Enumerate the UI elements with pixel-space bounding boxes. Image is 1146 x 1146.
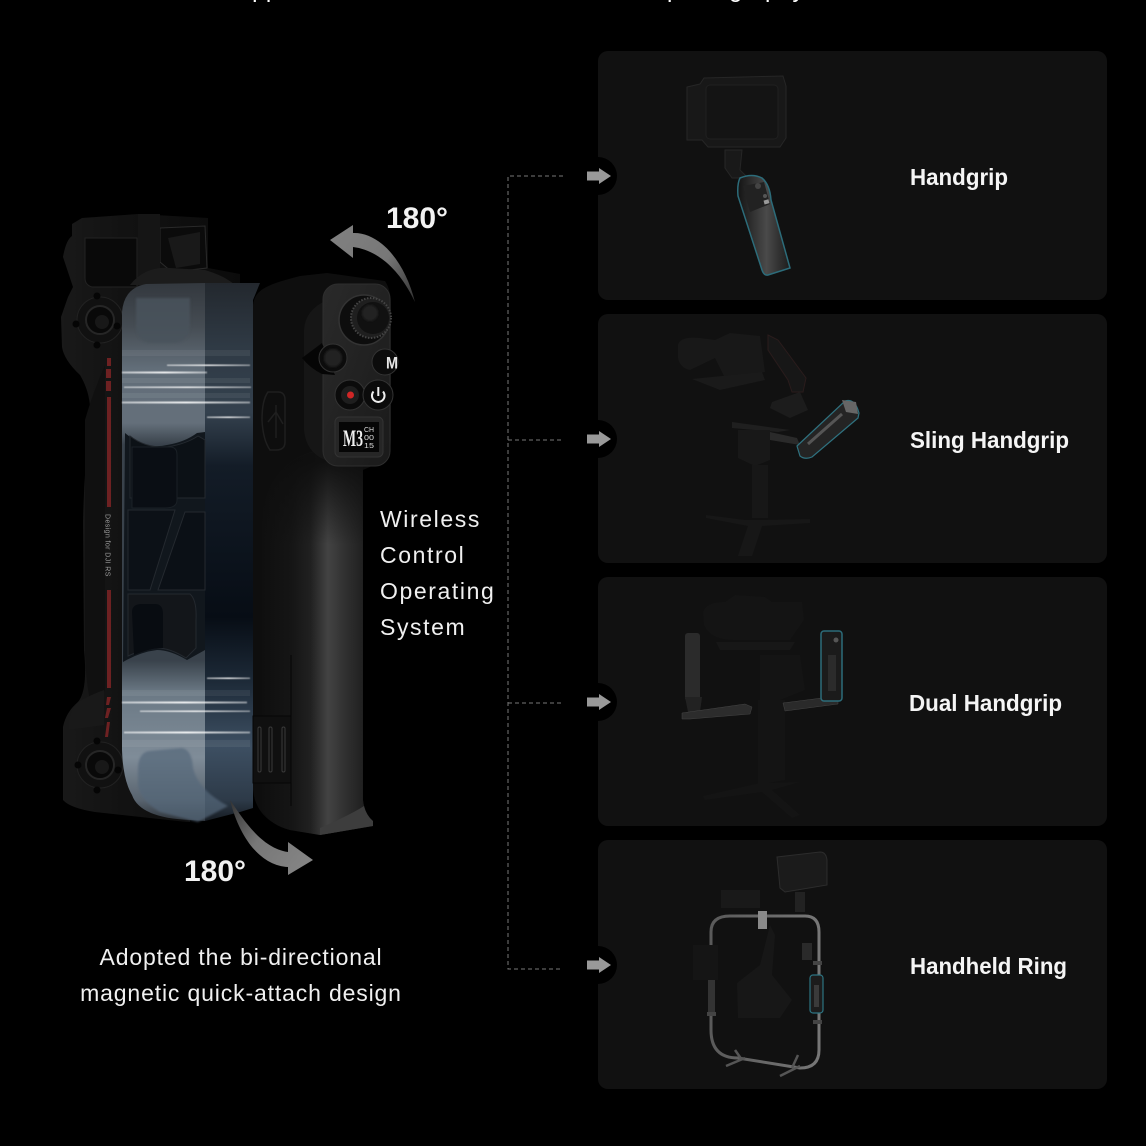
arm <box>682 704 752 719</box>
record button <box>335 380 365 410</box>
OLED screen: 15 <box>364 443 374 450</box>
product: wireless control handgrip <box>61 214 398 835</box>
icon: arrow <box>587 168 611 184</box>
joystick <box>339 295 391 345</box>
control panel bevel <box>304 300 327 460</box>
battery door seam <box>290 655 292 806</box>
text block: wireless control operating system: Operating <box>380 578 495 604</box>
text block: magnetic quick-attach caption: Adopted the bi-directional <box>100 944 382 970</box>
label: Handgrip <box>910 164 1008 190</box>
notch <box>579 683 617 721</box>
notch <box>579 157 617 195</box>
ring <box>711 916 819 1068</box>
label: 180 degrees bottom: 180° <box>184 855 246 888</box>
icon: handheld ring rig <box>693 852 827 1076</box>
power button <box>363 380 393 410</box>
arrow: rotate up 180 degrees <box>330 225 415 302</box>
handle shaft with highlight <box>262 450 373 835</box>
grip outline <box>821 631 842 701</box>
M button <box>372 349 398 375</box>
cage top window right <box>160 226 207 272</box>
cage post <box>138 214 160 280</box>
grip outline <box>810 975 823 1013</box>
left top knob <box>72 292 123 348</box>
icon: gimbal with dual handgrip <box>682 595 842 818</box>
label: Sling Handgrip <box>910 427 1069 453</box>
red accent stripes <box>105 358 111 737</box>
label: Handheld Ring <box>910 953 1067 979</box>
notch <box>579 946 617 984</box>
icon: arrow <box>587 694 611 710</box>
panel: sling handgrip <box>579 314 1107 563</box>
rear cage frame <box>61 214 240 822</box>
grip outline <box>797 400 859 458</box>
label: Dual Handgrip <box>909 690 1062 716</box>
handle top shadow <box>294 452 363 532</box>
ring feet <box>726 1050 800 1076</box>
OLED screen: CH <box>364 427 374 434</box>
battery door <box>253 716 291 783</box>
translucent magnetic plate <box>122 283 260 822</box>
plate window cut-outs <box>123 432 205 662</box>
panel: dual handgrip <box>579 577 1107 826</box>
icon: arrow <box>587 431 611 447</box>
text block: wireless control operating system: Wireless <box>380 506 481 532</box>
icon: gimbal with sling handgrip <box>678 333 859 556</box>
text block: magnetic quick-attach caption: magnetic quick-attach design <box>80 980 402 1006</box>
arrow: rotate down 180 degrees <box>230 800 313 875</box>
icon: arrow <box>587 957 611 973</box>
side dial <box>302 343 347 375</box>
control panel <box>302 284 398 466</box>
left bottom knob <box>74 738 123 794</box>
plate recess bottom <box>138 748 228 822</box>
panel: handgrip <box>579 51 1107 300</box>
dashed connector lines <box>508 176 563 969</box>
text block: magnetic quick-attach caption <box>80 944 402 1006</box>
M button: M <box>386 354 398 372</box>
USB port cover <box>262 392 285 450</box>
OLED screen <box>335 417 383 457</box>
plate recess top <box>136 298 190 343</box>
light streaks <box>122 364 251 734</box>
OLED screen: M3 <box>343 426 363 451</box>
text block: wireless control operating system: System <box>380 614 466 640</box>
notch <box>579 420 617 458</box>
suspended gimbal <box>737 925 792 1018</box>
handle foot flare <box>320 806 373 835</box>
cage top window left <box>85 238 137 287</box>
texture grip strip <box>85 365 105 706</box>
text block: wireless control operating system: Control <box>380 542 465 568</box>
grip outline <box>738 176 790 275</box>
frame label: Design for DJI RS <box>104 514 110 577</box>
plate soft bands <box>122 350 250 747</box>
text block: wireless control operating system <box>380 506 495 640</box>
panel: handheld ring <box>579 840 1107 1089</box>
grip handle <box>253 273 398 835</box>
OLED screen: 00 <box>364 435 374 442</box>
left handle <box>685 633 700 701</box>
label: 180 degrees top: 180° <box>386 202 448 235</box>
icon: handgrip on monitor <box>687 76 790 275</box>
